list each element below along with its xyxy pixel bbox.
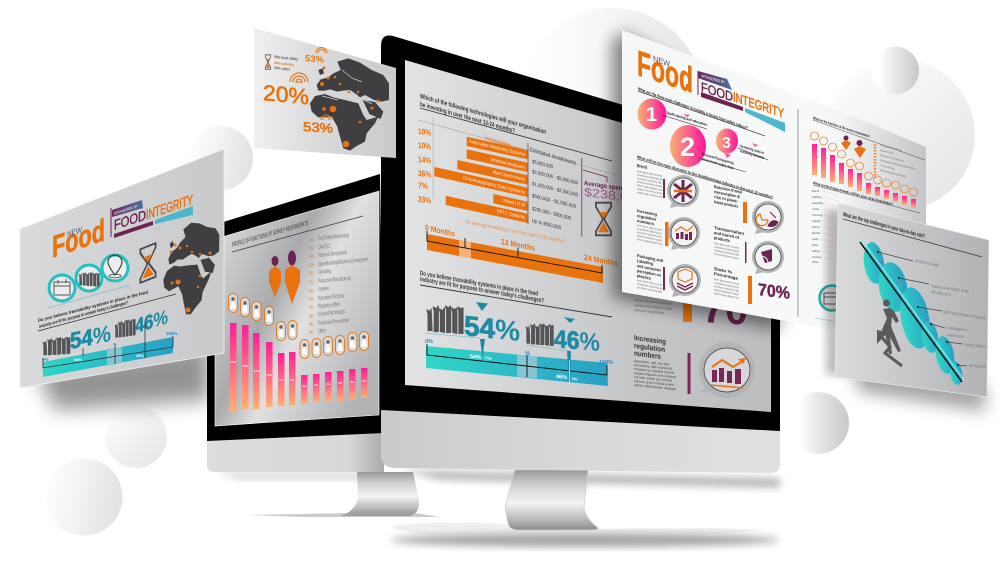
estimated investments column: $5,000,000 bbox=[532, 159, 553, 170]
54 percent yes stat: 54% bbox=[464, 310, 520, 347]
disruptor: increasing regulation: consectetuer adipiscing elit bbox=[637, 227, 662, 236]
Food Integrity logo: INTEGRITY bbox=[146, 192, 193, 223]
respondent function list: 11% bbox=[309, 262, 314, 269]
panel: traceability summary bbox=[20, 149, 224, 388]
disruptor: packaging: consectetuer adipiscing elit bbox=[637, 282, 662, 291]
technologies bar chart: Moisture Analysers bbox=[491, 157, 525, 171]
challenge 1: 1 bbox=[646, 104, 657, 126]
disruptor: Brexit: Brexit bbox=[637, 163, 647, 170]
challenge labels: Product/Food quality bbox=[915, 258, 940, 268]
respondent bar chart: 14% bbox=[254, 369, 260, 373]
disruptor: Brexit: sed diam nonummy nibh bbox=[637, 176, 662, 185]
icon: hourglass bbox=[596, 203, 611, 235]
back screen heading bbox=[232, 216, 363, 252]
53 percent top stat bbox=[305, 48, 327, 65]
challenge 2: across food supply chain bbox=[702, 156, 734, 171]
respondent function list: Scientist/Technologist bbox=[318, 309, 345, 318]
map of Europe and Africa bbox=[162, 210, 220, 327]
main monitor bezel bbox=[381, 35, 780, 431]
timeline: 24 Months bbox=[584, 253, 618, 268]
disruptor: Brexit: consectetuer adipiscing elit bbox=[637, 173, 662, 182]
arrow up the slope bbox=[877, 330, 902, 366]
icon: regulation growth bubble bbox=[698, 342, 755, 398]
back monitor stand bbox=[340, 472, 419, 516]
respondent bar chart: 7% bbox=[279, 378, 284, 382]
increasing regulation numbers block: Increasing bbox=[634, 333, 666, 346]
increasing regulation numbers block: description, add, text here bbox=[634, 359, 670, 367]
challenge 3: Increasing costs in bbox=[740, 143, 764, 155]
main monitor chin bbox=[381, 410, 780, 473]
legend with hourglass: 20% other bbox=[274, 66, 290, 72]
increasing regulation numbers block: tation ullamcorper suscipit bbox=[634, 383, 676, 391]
increasing regulation numbers block: nonummy nibh euismod bbox=[634, 363, 672, 371]
technologies heading: Which of the following technologies will your organisation bbox=[420, 93, 546, 136]
respondent function list: QA/QC bbox=[318, 244, 330, 251]
yes no progress bar: 0% bbox=[425, 339, 433, 345]
disruptor: Brexit: euismod tincidunt ut laoreet bbox=[637, 180, 662, 189]
right page function list: Research Development bbox=[880, 153, 904, 163]
average spend callout: Average spend bbox=[584, 180, 626, 193]
Food Integrity logo: FOOD bbox=[701, 79, 733, 104]
challenges heading: What are the three main challenges in creating a strong food safety culture? bbox=[638, 86, 748, 131]
yes no progress bar: 100% bbox=[166, 331, 178, 336]
respondent function list: 7% bbox=[309, 271, 313, 277]
disruptor: increasing regulation: Increasing bbox=[637, 208, 657, 217]
back monitor base line bbox=[247, 513, 440, 517]
right page table: Other bbox=[812, 260, 819, 264]
respondent function list: 4% bbox=[309, 289, 313, 295]
New Food logo: NEW bbox=[653, 54, 670, 69]
disruptor: meat reduction: rise in plant- bbox=[714, 194, 739, 204]
Food Integrity logo bbox=[111, 192, 193, 238]
54 percent stat bbox=[43, 320, 111, 357]
right page function list: Food Safety/Microbiology bbox=[880, 143, 902, 153]
partly hidden disruptor text: exercitation ullamco laboris nisi ut aliquip bbox=[634, 303, 672, 311]
challenge ellipses on slope bbox=[860, 240, 964, 386]
panel: three main challenges report bbox=[622, 30, 926, 346]
right page function list bbox=[875, 143, 916, 179]
adoption percentages: 10% bbox=[418, 140, 431, 152]
disruptor: packaging: Labelling bbox=[637, 258, 653, 266]
respondent function list: 4% bbox=[309, 330, 313, 336]
respondent bar chart: 18% bbox=[242, 364, 249, 368]
technologies bar chart: Automated Monitoring Systems bbox=[469, 139, 525, 158]
back monitor screen bbox=[215, 191, 379, 426]
46 percent stat bbox=[115, 305, 168, 339]
right page table: Data bbox=[812, 243, 818, 247]
disruptor: packaging: perception on bbox=[637, 268, 661, 278]
adoption percentages bbox=[418, 126, 431, 206]
challenge labels: requirements bbox=[947, 332, 964, 339]
respondent bar chart: 21% bbox=[230, 360, 237, 364]
New Food logo: Food bbox=[52, 212, 105, 265]
disruptor: transportation: consectetuer adipiscing elit bbox=[714, 245, 739, 254]
technologies bar chart: Chromatography Data Systems bbox=[463, 175, 526, 196]
respondent function list: 4% bbox=[309, 322, 313, 328]
timeline: 12 Months bbox=[501, 237, 535, 253]
back monitor: Sales/Marketing/Business Development bbox=[318, 257, 368, 268]
yes no progress bar bbox=[42, 322, 178, 377]
right page table: Brexit bbox=[812, 189, 819, 193]
respondent function list: 18% bbox=[309, 245, 314, 252]
increasing regulation numbers block: numbers bbox=[634, 349, 661, 361]
right page table: What technologies/trends will be your next investment? bbox=[813, 181, 893, 207]
disruptor: increasing regulation: euismod tincidunt ut laoreet bbox=[637, 234, 662, 243]
respondent bar chart bbox=[228, 294, 368, 411]
challenge 3 bbox=[716, 128, 768, 160]
respondent bar chart: 4% bbox=[326, 382, 331, 386]
respondent bar chart: 4% bbox=[338, 381, 343, 385]
challenge labels bbox=[877, 251, 986, 369]
disruptor: transportation: euismod tincidunt ut laoreet bbox=[714, 252, 739, 261]
stats percentage: lorem ipsum dolor sit amet bbox=[714, 277, 739, 286]
disruptor: meat reduction bbox=[714, 184, 784, 234]
respondent bar chart: 4% bbox=[314, 383, 319, 387]
right page heading: What are the functions of the survey respondents? bbox=[813, 115, 870, 139]
map of Europe and Africa bbox=[310, 58, 389, 151]
technologies bar chart: Technologies bbox=[484, 135, 511, 149]
increasing regulation numbers block: magna aliquam erat volutpat bbox=[634, 371, 676, 379]
right page table: Audit bbox=[812, 237, 819, 241]
yes no progress bar: 54% bbox=[74, 357, 82, 362]
yes no progress bar: 100% bbox=[599, 360, 613, 366]
respondent bar chart: 4% bbox=[350, 380, 355, 384]
right page function list: Consulting bbox=[880, 163, 894, 171]
back monitor bbox=[207, 174, 440, 517]
technologies bar chart: HPLC Systems bbox=[497, 208, 525, 221]
partly hidden 70 percent stat bbox=[683, 284, 748, 334]
technologies bar chart bbox=[434, 135, 528, 224]
legend with hourglass bbox=[265, 55, 299, 72]
soft shadows bbox=[35, 342, 985, 547]
53 percent bottom stat bbox=[303, 115, 333, 136]
stats percentage: 70% bbox=[758, 280, 790, 303]
main monitor screen bbox=[405, 60, 771, 412]
disruptor: meat reduction: consumption & bbox=[714, 189, 740, 199]
disruptor: meat reduction: based products bbox=[714, 199, 738, 209]
respondent function list: Engineer bbox=[318, 286, 329, 293]
estimated investments column: Estimated investments bbox=[530, 147, 576, 167]
average spend callout bbox=[582, 158, 636, 237]
stats percentage: dolore magna aliquam erat bbox=[714, 291, 739, 300]
icon: hourglass bbox=[140, 243, 156, 283]
challenge 2: 2 bbox=[680, 132, 695, 162]
New Food logo bbox=[52, 212, 105, 265]
increasing regulation numbers block: Ut wisi enim ad minim bbox=[634, 375, 672, 383]
respondent bar chart: 4% bbox=[302, 384, 307, 388]
disruptor: Brexit bbox=[637, 163, 699, 208]
challenge labels: HR Resource bbox=[969, 363, 986, 369]
estimated investments column: $2,000,000 - $5,000,000 bbox=[532, 169, 578, 187]
respondent function list: Other bbox=[318, 328, 326, 335]
average spend callout: $238,09 bbox=[584, 185, 636, 205]
disruptor: Brexit: veniam quis nostrud exerci bbox=[637, 190, 662, 199]
right page table: Supply bbox=[812, 219, 821, 223]
adoption percentages: 7% bbox=[418, 180, 428, 191]
partly hidden disruptor text: description, add, text here, quis nostrud bbox=[634, 298, 672, 306]
respondent function list: Food Safety/Microbiology bbox=[318, 233, 349, 242]
right page teal ring icon bbox=[815, 286, 844, 322]
stats percentage: consectetuer adipiscing elit bbox=[714, 281, 739, 290]
Food Integrity logo: FOOD bbox=[114, 208, 146, 234]
stats percentage: euismod tincidunt ut laoreet bbox=[714, 288, 739, 297]
back monitor chin bbox=[207, 433, 384, 472]
respondent silhouettes bbox=[269, 250, 300, 304]
yes no progress bar: 46% bbox=[136, 353, 144, 358]
stats percentage: Percentage bbox=[714, 271, 739, 281]
stats percentage: sed diam nonummy nibh bbox=[714, 284, 739, 293]
46 percent stat: 46% bbox=[135, 305, 168, 338]
estimated investments column: $1,000,000 - $2,000,000 bbox=[532, 181, 578, 199]
estimated investments column: $250,000 - $500,000 bbox=[532, 206, 571, 222]
runner on slope bbox=[882, 300, 901, 354]
increasing regulation numbers block: regulation bbox=[634, 341, 665, 354]
back monitor bezel bbox=[207, 174, 384, 441]
respondent function list: 21% bbox=[309, 237, 314, 244]
adoption percentages: 14% bbox=[418, 154, 431, 166]
right page silhouettes bbox=[841, 136, 866, 158]
53 percent top stat: 53% bbox=[305, 53, 324, 65]
respondent bar chart: 11% bbox=[266, 373, 272, 377]
54 percent yes stat bbox=[425, 302, 520, 347]
respondent function list: Research Development bbox=[318, 250, 347, 259]
challenge labels: and safety items bbox=[931, 289, 951, 297]
traceability heading: Do you believe traceability systems in place in the food bbox=[420, 270, 538, 298]
20 percent stat: 20% bbox=[263, 80, 309, 110]
challenge labels: Cost/Management bbox=[947, 325, 967, 332]
yes no progress bar: 0% bbox=[42, 357, 49, 362]
Food Integrity logo: SPONSORED BY bbox=[114, 203, 138, 216]
challenge 1 bbox=[638, 98, 707, 130]
increasing regulation numbers block bbox=[634, 333, 690, 394]
right page table: Safety bbox=[812, 249, 821, 253]
increasing regulation numbers block: tincidunt ut laoreet dolore bbox=[634, 367, 674, 375]
Food Integrity logo: SPONSORED BY bbox=[701, 73, 725, 85]
yes no progress bar: % bbox=[113, 342, 117, 347]
respondent function list bbox=[309, 233, 368, 336]
New Food logo: Food bbox=[637, 43, 693, 101]
technologies heading: be investing in over the next 12-24 months? bbox=[420, 101, 515, 135]
timeline: 0 Months bbox=[425, 223, 455, 239]
right page table: Staffing bbox=[812, 195, 822, 199]
right page heading bbox=[813, 115, 925, 160]
estimated investments column: $500,000 - $1,000,000 bbox=[532, 193, 576, 210]
54 percent stat: 54% bbox=[70, 320, 111, 354]
panel: map with percentages bbox=[254, 28, 396, 158]
disruptor: increasing regulation: lorem ipsum dolor sit amet bbox=[637, 223, 662, 232]
disruptor: transportation: and transit of bbox=[714, 230, 740, 240]
traceability heading: industry are fit for purpose to answer today's challenges? bbox=[420, 276, 544, 305]
53 percent bottom stat: 53% bbox=[303, 119, 333, 136]
challenge labels: Keeping up with latest/ Health bbox=[931, 283, 969, 294]
adoption percentages: 36% bbox=[418, 168, 431, 180]
disruptor: packaging: Packaging and bbox=[637, 253, 663, 263]
respondent function list: 4% bbox=[309, 297, 313, 303]
right page table: Testing bbox=[812, 255, 821, 259]
yes no progress bar: 46% bbox=[556, 374, 567, 381]
shadow of challenges panel bbox=[826, 210, 850, 375]
technologies bar chart: Infrared / FT-IR bbox=[503, 198, 525, 209]
respondent function list: Consulting bbox=[318, 269, 331, 276]
respondent function list: Regulatory Affairs bbox=[318, 302, 340, 310]
yes no progress bar: No bbox=[572, 376, 578, 382]
respondent bar chart: 4% bbox=[362, 379, 367, 383]
disruptor: packaging: lorem ipsum dolor sit amet bbox=[637, 278, 662, 287]
disruptor: increasing regulation: sed diam nonummy nibh bbox=[637, 230, 662, 239]
partly hidden 70 percent stat: 70 bbox=[702, 284, 748, 334]
timeline: On average investing in over the next 12-24 months? bbox=[465, 219, 565, 245]
respondent function list: Operations/Technical bbox=[318, 293, 344, 302]
disruptor: increasing regulation bbox=[637, 208, 700, 250]
challenge 3: sustaining demands bbox=[740, 148, 764, 160]
main monitor base highlight bbox=[393, 522, 765, 535]
right page table: Recall bbox=[812, 231, 820, 235]
right page function list: QA/QC bbox=[880, 148, 894, 155]
disruptor: increasing regulation: numbers bbox=[637, 218, 655, 227]
disruptor: increasing regulation: regulation bbox=[637, 213, 656, 222]
disruptor: meat reduction: Reduction of meat bbox=[714, 184, 742, 195]
Food Integrity logo: INTEGRITY bbox=[733, 89, 784, 121]
back screen heading: PROFILE OF FUNCTIONS OF SURVEY RESPONDENTS bbox=[232, 220, 308, 249]
disruptor heading: What will be the main disruptor to the food/beverage industry in the next 12 months? bbox=[637, 154, 773, 200]
main monitor stand bbox=[505, 470, 598, 530]
yes no progress bar: Yes bbox=[485, 355, 493, 361]
shadow of right panel bbox=[612, 32, 780, 330]
respondent function list: 4% bbox=[309, 305, 313, 311]
traceability heading: Do you believe traceability systems in place in the food bbox=[38, 289, 148, 323]
Food Integrity logo bbox=[698, 71, 785, 132]
disruptor: Brexit: lorem ipsum dolor sit amet bbox=[637, 169, 662, 178]
yes no progress bar: % bbox=[525, 351, 530, 357]
right page table: Labelling bbox=[812, 201, 824, 205]
disruptor: packaging: sed diam nonummy nibh bbox=[637, 285, 662, 294]
right page bar chart bbox=[810, 132, 918, 208]
New Food logo: NEW bbox=[67, 225, 82, 239]
disruptor: transportation: Transportation bbox=[714, 225, 744, 236]
disruptor: Brexit: dolore magna aliquam erat bbox=[637, 183, 662, 192]
estimated investments column bbox=[530, 147, 578, 231]
traceability heading: industry are fit for purpose to answer today's challenges? bbox=[39, 300, 128, 329]
disruptor: transportation: sed diam nonummy nibh bbox=[714, 248, 739, 257]
right page table: Costs bbox=[812, 207, 820, 211]
disruptor: Brexit: volutpat ut wisi enim ad minim bbox=[637, 187, 662, 196]
New Food logo bbox=[637, 43, 693, 101]
disruptor: increasing regulation: dolore magna aliquam erat bbox=[637, 237, 662, 246]
disruptor: transportation: lorem ipsum dolor sit amet bbox=[714, 241, 739, 250]
right page table: Fraud bbox=[812, 225, 820, 229]
disruptor: packaging bbox=[637, 253, 701, 297]
right page function list: Sales/Marketing/Business Development bbox=[880, 158, 916, 171]
challenge 3: 3 bbox=[722, 135, 731, 152]
challenge 2: Resource/Transparency bbox=[702, 151, 735, 166]
respondent function list: 7% bbox=[309, 280, 313, 286]
technologies bar chart: Mass Spectrometry bbox=[493, 169, 525, 183]
stats percentage bbox=[714, 266, 790, 304]
46 percent no stat: 46% bbox=[554, 325, 600, 357]
main monitor bbox=[381, 35, 780, 535]
respondent function list: 14% bbox=[309, 253, 314, 260]
increasing regulation numbers block: veniam, quis nostrud exerci bbox=[634, 379, 674, 387]
partly hidden disruptor text: ullamcorper suscipit lobortis bbox=[634, 308, 664, 315]
challenge 2 bbox=[670, 125, 746, 172]
legend with hourglass: 50% food safety bbox=[274, 55, 299, 61]
yes no progress bar bbox=[425, 339, 613, 386]
estimated investments column: Up to $500,000 bbox=[532, 218, 561, 231]
disruptor: transportation: products bbox=[714, 235, 731, 243]
timeline bbox=[425, 219, 618, 283]
46 percent no stat bbox=[526, 317, 600, 357]
icon rings bbox=[48, 255, 130, 308]
legend with hourglass: 30% industry bbox=[274, 61, 295, 67]
right page function list: Production/Manufacturing bbox=[880, 168, 906, 179]
challenges heading: What are the top challenges in your day-to-day role? bbox=[843, 212, 925, 240]
partly hidden disruptor text bbox=[634, 298, 672, 315]
respondent function list: Production/Manufacturing bbox=[318, 276, 351, 285]
right page table: Training bbox=[812, 213, 822, 217]
respondent function list: Production/Procurement bbox=[318, 318, 349, 327]
disruptor: packaging: and consumer bbox=[637, 263, 661, 273]
disruptor: packaging: plastics bbox=[637, 273, 652, 281]
adoption percentages: 10% bbox=[418, 126, 431, 138]
stats percentage: Stats % bbox=[714, 266, 732, 275]
challenge 1: Staff training and education bbox=[667, 110, 707, 127]
right page table bbox=[812, 181, 920, 264]
disruptor: transportation bbox=[714, 225, 784, 274]
panel: top challenges in day-to-day role bbox=[835, 203, 989, 397]
adoption percentages: 33% bbox=[418, 194, 431, 206]
respondent function list: 4% bbox=[309, 314, 313, 320]
respondent bar chart: 7% bbox=[290, 378, 295, 382]
yes no progress bar: 54% bbox=[470, 354, 481, 361]
